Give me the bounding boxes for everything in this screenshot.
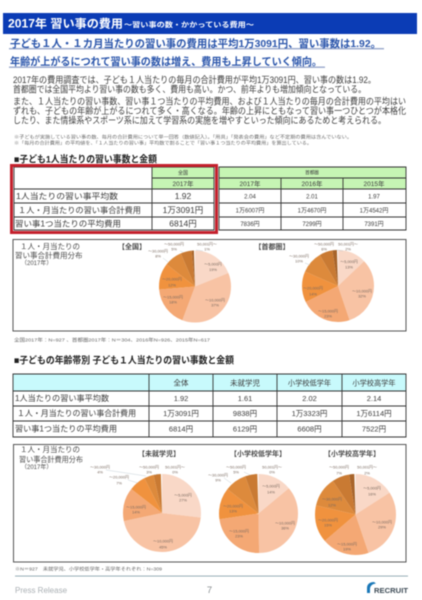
pie: preschool: ～10,000円 xyxy=(153,538,173,544)
panel: cost distribution by age: 習い事合計費用分布 xyxy=(19,454,83,464)
pie: national: ～30,000円 xyxy=(148,248,168,254)
table: by age group: 1万3091円 xyxy=(163,409,199,418)
pie: lower elementary: 0% xyxy=(269,470,275,474)
footer rule xyxy=(15,575,408,578)
pie: national: 8% xyxy=(155,254,161,258)
pie: upper elementary: 16% xyxy=(368,492,376,496)
table: national: 2017年 xyxy=(173,179,194,188)
pie: metropolitan area: 50,001円～ xyxy=(338,242,358,246)
pie: preschool: 3% xyxy=(146,470,152,474)
pie: lower elementary: ～5,000円 xyxy=(262,484,280,488)
pie: national: 5% xyxy=(171,246,177,252)
table: national: 1万3091円 xyxy=(163,205,203,215)
table: by age group: 全体 xyxy=(174,378,189,388)
table: national: 全国 xyxy=(178,170,188,176)
table: by age group: 7522円 xyxy=(362,424,386,434)
pie: preschool: ～50,000円 xyxy=(139,464,159,470)
pie: metropolitan area: ～10,000円 xyxy=(352,288,372,294)
heading: per-child table: ■子ども1人当たりの習い事数と金額 xyxy=(14,154,157,166)
panel: cost distribution national and metro: 【首都圏】 xyxy=(254,242,290,251)
pie: lower elementary: ～50,000円 xyxy=(226,464,246,470)
pie: preschool: ～15,000円 xyxy=(126,504,146,510)
table: national: 習い事1つ当たりの平均費用 xyxy=(15,218,121,228)
panel: cost distribution national and metro: （2017年） xyxy=(21,259,52,267)
sample size note 1: 全国2017年：N=927 、首都圏2017年：N＝304、2016年N=926、2015年N=617 xyxy=(14,336,211,344)
pie: lower elementary: 14% xyxy=(267,490,275,494)
body text xyxy=(13,74,406,126)
pie: national: ～20,000円 xyxy=(162,276,182,282)
pie: national: ～15,000円 xyxy=(163,294,183,300)
pie: upper elementary: ～30,000円 xyxy=(322,496,342,502)
pie: metropolitan area: 13% xyxy=(345,264,353,270)
pie: national: ～10,000円 xyxy=(205,298,225,302)
title banner xyxy=(3,13,417,34)
table: by age group: 小学校低学年 xyxy=(288,378,331,388)
page number: 7 xyxy=(207,585,212,596)
table: national: 1.92 xyxy=(175,191,192,201)
panel: cost distribution national and metro: １人・月当たりの xyxy=(20,241,80,251)
pie: preschool: ～5,000円 xyxy=(174,492,192,498)
table: metropolitan area: 2016年 xyxy=(302,179,323,188)
table: metropolitan area: 1万6007円 xyxy=(236,208,264,214)
pie: lower elementary: 13% xyxy=(229,508,237,514)
pie: preschool: ～20,000円 xyxy=(109,474,129,480)
pie: upper elementary: 29% xyxy=(378,524,386,530)
pie: national xyxy=(148,242,231,322)
pie: metropolitan area: 6% xyxy=(321,246,327,252)
panel: cost distribution by age xyxy=(14,444,406,562)
pie: metropolitan area: 14% xyxy=(309,292,317,296)
pie: metropolitan area: 32% xyxy=(358,294,366,298)
pie: upper elementary: 50,001円～ xyxy=(357,464,377,470)
pie: upper elementary: 2% xyxy=(364,470,370,476)
sample size note 2: ※N＝927 未就学児、小学校低学年・高学年それぞれ：N=309 xyxy=(15,566,162,572)
pie: lower elementary: 23% xyxy=(235,534,243,538)
table: metropolitan area: 7299円 xyxy=(302,221,322,228)
body text: 首都圏では全国平均より習い事の数も多く、費用も高い。かつ、前年よりも増加傾向となっている。 xyxy=(13,84,366,94)
pie: metropolitan area: ～20,000円 xyxy=(303,286,323,290)
title banner: 2017年 習い事の費用 xyxy=(8,16,123,30)
table: metropolitan area: 2015年 xyxy=(364,179,385,188)
pie: upper elementary: ～20,000円 xyxy=(318,518,338,522)
pie: national: 1% xyxy=(204,246,210,252)
table: by age group: 6814円 xyxy=(169,424,193,434)
logo: Recruit xyxy=(367,582,409,595)
pie: preschool: 14% xyxy=(132,510,140,514)
pie: upper elementary xyxy=(315,464,396,555)
pie: lower elementary: 36% xyxy=(281,526,289,530)
pie: national: ～5,000円 xyxy=(204,262,222,266)
panel: cost distribution by age: １人・月当たりの xyxy=(20,444,80,454)
pie: upper elementary: ～50,000円 xyxy=(329,464,349,470)
pie: lower elementary: ～20,000円 xyxy=(223,504,243,508)
pie: metropolitan area: ～5,000円 xyxy=(340,259,358,264)
pie: metropolitan area: ～30,000円 xyxy=(289,254,309,258)
table: metropolitan area: 2017年 xyxy=(240,179,261,188)
pie: lower elementary: ～10,000円 xyxy=(275,520,295,526)
pie: lower elementary: 50,001円～ xyxy=(262,464,282,470)
table: by age group: 2.14 xyxy=(367,394,381,403)
table: metropolitan area: 1万4542円 xyxy=(360,208,388,214)
pie: upper elementary: 7% xyxy=(336,470,342,476)
table: by age group: 習い事1つ当たりの平均費用 xyxy=(15,424,117,434)
pie: metropolitan area xyxy=(289,242,374,322)
table: national: １人・月当たりの習い事合計費用 xyxy=(18,205,141,215)
pie: national: ～50,000円 xyxy=(164,242,184,246)
table: metropolitan area: 2.04 xyxy=(244,194,256,200)
pie: preschool: 7% xyxy=(116,480,122,486)
table: metropolitan area: 1.97 xyxy=(368,194,380,200)
table: by age group: 1人当たりの習い事平均数 xyxy=(15,393,109,403)
table: metropolitan area xyxy=(219,167,406,230)
footer: press release: Press Release xyxy=(15,586,68,595)
pie: national: 12% xyxy=(168,282,176,288)
table: by age group: 6129円 xyxy=(233,424,257,434)
footnotes: ※「毎月の合計費用」の平均値を、「１人当たりの習い事」平均数で割ることで「習い事１つ当たりの平均費用」を算出している。 xyxy=(14,140,312,147)
table: national: 6814円 xyxy=(169,218,197,228)
pie: preschool: ～30,000円 xyxy=(90,464,110,470)
pie: lower elementary xyxy=(208,464,298,553)
panel: cost distribution by age: 【小学校高学年】 xyxy=(324,449,380,458)
table: by age group: 未就学児 xyxy=(230,378,260,388)
panel: cost distribution by age: 【小学校低学年】 xyxy=(230,449,286,458)
pie: lower elementary: ～15,000円 xyxy=(229,528,249,534)
table: by age group: 6608円 xyxy=(297,424,322,434)
pie: lower elementary: 5% xyxy=(233,470,239,474)
footnotes xyxy=(14,134,352,147)
panel: cost distribution by age: （2017年） xyxy=(21,463,52,471)
table: by age group: 2.02 xyxy=(302,394,317,403)
pie: preschool: 27% xyxy=(179,498,187,502)
pie: upper elementary: ～5,000円 xyxy=(363,486,381,490)
headline: age trend: 年齢が上がるにつれて習い事の数は増え、費用も上昇していく傾向。 xyxy=(10,55,322,68)
pie: preschool xyxy=(90,464,201,552)
pie: lower elementary: ～30,000円 xyxy=(208,472,228,478)
table: national xyxy=(14,167,214,230)
pie: metropolitan area: ～50,000円 xyxy=(314,242,334,246)
table: by age group: 小学校高学年 xyxy=(352,378,396,388)
pie: metropolitan area: 10% xyxy=(295,258,303,264)
footnotes: ※子どもが実施している習い事の数、毎月の合計費用について単一回答（数値記入）。「用具」「発表会の費用」など不定期の費用は含んでいない。 xyxy=(14,134,352,141)
pie: upper elementary: ～15,000円 xyxy=(337,542,357,546)
red highlight box xyxy=(12,166,216,232)
heading: by age table: ■子どもの年齢帯別 子ども１人当たりの習い事数と金額 xyxy=(14,354,234,366)
body text: 2017年の費用調査では、子ども１人当たりの毎月の合計費用が平均1万3091円、習い事の数は1.92。 xyxy=(13,74,376,85)
table: by age group: 9838円 xyxy=(233,409,257,418)
pie: upper elementary: 15% xyxy=(324,522,332,528)
pie: national: 37% xyxy=(211,302,219,308)
pie: metropolitan area: 23% xyxy=(324,314,332,318)
panel: cost distribution national and metro: 【全国】 xyxy=(118,242,146,251)
pie: preschool: 4% xyxy=(97,470,103,474)
table: by age group: 1.92 xyxy=(174,394,188,403)
pie: national: 50,001円～ xyxy=(197,242,217,246)
headline: average cost: 子ども１人・１カ月当たりの習い事の費用は平均1万3091円、習い事数は1.92。 xyxy=(10,37,381,50)
table: metropolitan area: 首都圏 xyxy=(305,169,319,176)
table: metropolitan area: 1万4670円 xyxy=(298,208,326,214)
table: by age group: 1万3323円 xyxy=(292,409,327,418)
pie: preschool: 50,001円～ xyxy=(165,464,185,470)
title banner: ～習い事の数・かかっている費用～ xyxy=(124,20,254,29)
pie: upper elementary: 19% xyxy=(343,546,351,552)
panel: cost distribution national and metro xyxy=(13,240,406,331)
pie: upper elementary: ～10,000円 xyxy=(372,520,392,524)
table: metropolitan area: 7391円 xyxy=(364,221,384,228)
pie: national: 19% xyxy=(209,267,217,272)
pie: preschool: 0% xyxy=(172,470,178,474)
panel: cost distribution national and metro: 習い事合計費用分布 xyxy=(15,250,83,260)
table: national: 1人当たりの習い事平均数 xyxy=(16,191,118,201)
table: by age group: 1.61 xyxy=(238,394,252,403)
pie: metropolitan area: ～15,000円 xyxy=(318,308,338,314)
table: by age group xyxy=(13,374,406,437)
pie: lower elementary: 9% xyxy=(215,478,221,482)
table: by age group: 1万6114円 xyxy=(356,409,392,418)
table: metropolitan area: 2.01 xyxy=(306,194,318,200)
pie: upper elementary: 12% xyxy=(328,502,336,508)
logo: Recruit: RECRUIT xyxy=(374,588,409,595)
pie: preschool: 45% xyxy=(159,544,167,550)
pie: national: 18% xyxy=(169,300,177,304)
panel: cost distribution by age: 【未就学児】 xyxy=(138,449,180,458)
table: by age group: １人・月当たりの習い事合計費用 xyxy=(17,408,136,418)
pie: metropolitan area: 2% xyxy=(345,246,351,252)
table: metropolitan area: 7836円 xyxy=(240,221,260,228)
